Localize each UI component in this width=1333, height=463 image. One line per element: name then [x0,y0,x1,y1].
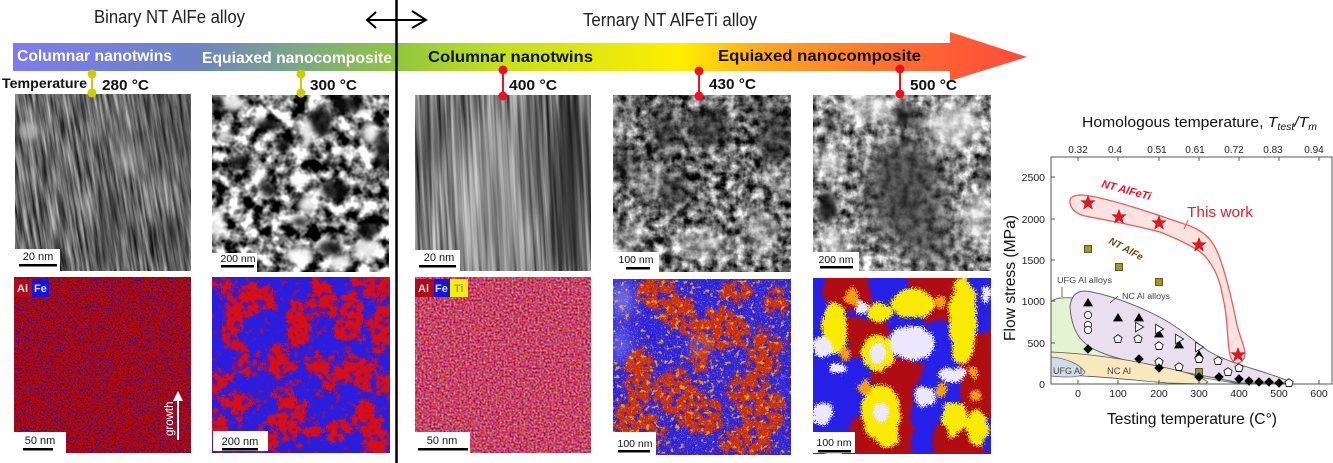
element key: Al Fe Ti: Al [418,283,429,295]
arrow phase labels: Columnar nanotwins [17,48,172,65]
y axis values: 1500 [1022,255,1045,267]
temperature values [102,76,957,94]
region labels [1053,275,1170,377]
element key: Al Fe Ti [415,279,468,297]
TEM image: binary 300 C nanocomposite [210,95,391,272]
scale bar: 100 nm [813,432,855,453]
scale bar: 100 nm: 100 nm [816,437,852,449]
scale bar: 100 nm: 100 nm [617,438,653,450]
y axis values: 0 [1039,379,1045,391]
callout: this work [1184,204,1254,229]
top axis values: 0.94 [1304,145,1324,156]
top axis values [1068,145,1324,156]
x axis values: 600 [1310,388,1328,400]
scale bar: 50 nm [415,432,470,453]
arrow phase labels: Equiaxed nanocomposite [718,48,921,65]
NT AlFeTi label: NT AlFeTi [1100,178,1153,203]
scale bar: 200 nm: 200 nm [818,254,854,266]
scale bar: 200 nm [212,253,257,272]
x axis values [1075,388,1328,400]
chart: flow stress versus temperature [1002,114,1332,428]
callout: this work: This work [1187,204,1254,221]
element key: Al Fe: Al [17,283,28,295]
EDS map: ternary 500 C nanocomposite [813,278,991,454]
region: UFG Al [1051,357,1085,377]
element key: Al Fe: Fe [34,283,47,295]
temperature values: 280 °C [102,77,149,94]
top axis values: 0.32 [1068,145,1088,156]
y axis title: Flow stress (MPa) [1002,215,1019,341]
top axis values: 0.51 [1147,145,1167,156]
arrow phase labels [17,48,921,67]
y axis values: 500 [1027,338,1045,350]
scale bar: 20 nm [415,250,460,271]
temperature markers: ternary alloy [498,64,904,100]
heading: ternary alloy: Ternary NT AlFeTi alloy [583,10,757,30]
NT AlFe data squares [1084,246,1202,376]
heading: binary alloy: Binary NT AlFe alloy [94,7,245,27]
EDS map: binary nanocomposite [212,277,390,453]
x axis values: 100 [1109,388,1127,400]
element key: Al Fe Ti: Fe [435,283,448,295]
double-headed arrow [367,11,426,28]
temperature values: 500 °C [910,77,957,94]
temperature values: 300 °C [310,77,357,94]
chart top title: /T [1293,114,1310,131]
scale bar: 50 nm: 50 nm [25,435,55,447]
TEM image: ternary 500 C nanocomposite [813,95,991,271]
x axis values: 400 [1230,388,1248,400]
top axis values: 0.72 [1224,145,1244,156]
scale bar: 20 nm [15,249,60,271]
region labels: NC Al [1107,366,1131,377]
region labels: UFG Al alloys [1057,275,1112,285]
element key: Al Fe Ti: Ti [454,283,464,295]
scale bar: 200 nm [813,252,859,271]
growth direction arrow [164,391,183,440]
scale bar: 100 nm: 100 nm [618,254,654,266]
x axis values: 0 [1075,388,1081,400]
y axis values: 1000 [1022,296,1045,308]
NT AlFeTi data stars [1081,196,1245,361]
top axis values: 0.4 [1108,145,1122,156]
EDS map: ternary 430 C nanocomposite [613,279,791,455]
scale bar: 100 nm [613,252,659,272]
EDS map: binary columnar [14,277,191,453]
scale bar: 200 nm [213,431,268,451]
left whitish-blue column [614,282,707,361]
growth direction arrow: growth [164,401,176,436]
element key: Al Fe [14,279,49,297]
TEM image: binary 280 C columnar [15,94,191,271]
y axis values: 2000 [1022,214,1045,226]
scale bar: 50 nm [14,432,66,453]
temperature values: 400 °C [509,77,557,94]
temperature markers: binary alloy [88,70,306,98]
vertical divider between alloys [395,0,398,463]
region: NC Al alloys [1070,291,1293,383]
arrow phase labels: Columnar nanotwins [428,49,593,66]
region: this work band [1070,195,1245,363]
TEM image: ternary 430 C nanocomposite [611,94,797,272]
temperature gradient arrow [13,32,1027,81]
chart top title: Homologous temperature, T [1082,114,1277,131]
scale bar: 20 nm: 20 nm [424,252,454,264]
temperature values: 430 °C [709,76,756,93]
y axis values [1022,172,1045,391]
scale bar: 200 nm: 200 nm [220,253,256,265]
region labels: NC Al alloys [1122,291,1170,301]
EDS map: ternary columnar [415,277,591,453]
arrow phase labels: Equiaxed nanocomposite [202,50,392,67]
x axis values: 500 [1270,388,1288,400]
scale bar: 20 nm: 20 nm [23,251,53,263]
scale bar: 100 nm [613,432,656,455]
top axis values: 0.83 [1263,145,1283,156]
x axis values: 300 [1190,388,1208,400]
literature markers [1083,298,1293,388]
NT AlFe label: NT AlFe [1107,236,1145,263]
chart top title: m [1308,122,1317,133]
temperature row label: Temperature [2,75,87,91]
region labels: UFG Al [1053,366,1082,377]
plot frame and ticks [1051,157,1332,384]
chart top title: test [1277,122,1296,133]
TEM image: ternary 400 C columnar [415,95,591,271]
top axis values: 0.61 [1185,145,1205,156]
scale bar: 50 nm: 50 nm [427,435,457,447]
region: UFG Al alloys [1051,298,1240,384]
scale bar: 200 nm: 200 nm [222,436,258,448]
y axis values: 2500 [1022,172,1045,184]
x axis title: Testing temperature (C°) [1107,411,1277,428]
x axis values: 200 [1150,388,1168,400]
region: NC Al [1051,352,1208,384]
